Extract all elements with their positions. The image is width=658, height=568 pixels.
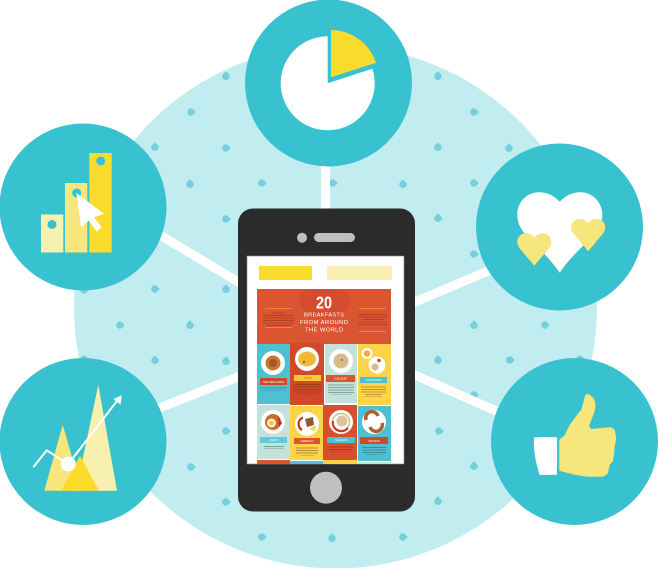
tile: Iceland: ICELAND xyxy=(334,377,347,381)
headline xyxy=(300,312,348,334)
headline: THE WORLD xyxy=(305,328,343,334)
tile: Japan: JAPAN xyxy=(269,438,278,442)
headline number: 20 xyxy=(316,292,332,312)
tile: Thailand xyxy=(327,410,355,452)
phone body xyxy=(238,208,415,512)
speaker xyxy=(314,233,355,242)
camera xyxy=(297,233,307,243)
icon: rising chart over peaks xyxy=(0,358,166,525)
icon: bar chart with cursor xyxy=(0,124,166,290)
infographic header panel xyxy=(257,289,391,344)
tile: Japan xyxy=(260,410,287,449)
tile: Germany xyxy=(294,412,320,456)
tile: Philippines xyxy=(360,348,387,397)
headline: FROM AROUND xyxy=(300,320,348,326)
screen header bar: pale xyxy=(327,266,392,280)
icon: pie chart xyxy=(245,0,412,166)
screen header bar: yellow xyxy=(259,266,312,280)
home button xyxy=(310,472,342,504)
food infographic inside the screen xyxy=(257,289,391,465)
tile: Philippines: PHILIPPINES xyxy=(366,379,382,382)
background disc with droplet pattern xyxy=(74,46,597,568)
smartphone xyxy=(238,208,415,512)
breakfast tiles grid xyxy=(257,343,391,465)
tile: France xyxy=(360,410,388,455)
tile: Germany: GERMANY xyxy=(300,439,314,443)
world map silhouette xyxy=(302,290,350,318)
screen xyxy=(247,256,404,464)
tile: Thailand: THAILAND xyxy=(335,438,348,442)
icon: hearts xyxy=(476,144,643,310)
connector lines from phone to icons xyxy=(152,160,505,415)
headline: BREAKFASTS xyxy=(304,312,344,318)
tile: Spain: SPAIN xyxy=(303,376,312,380)
tile: France: FRANCE xyxy=(368,439,380,443)
tile: Netherlands: NETHERLANDS xyxy=(263,380,284,384)
tile: Netherlands xyxy=(260,351,287,390)
tile: Iceland xyxy=(326,349,355,395)
tile: Spain xyxy=(293,347,322,395)
icon: thumbs up xyxy=(491,358,658,525)
gold rules and intro copy lines xyxy=(263,308,387,332)
